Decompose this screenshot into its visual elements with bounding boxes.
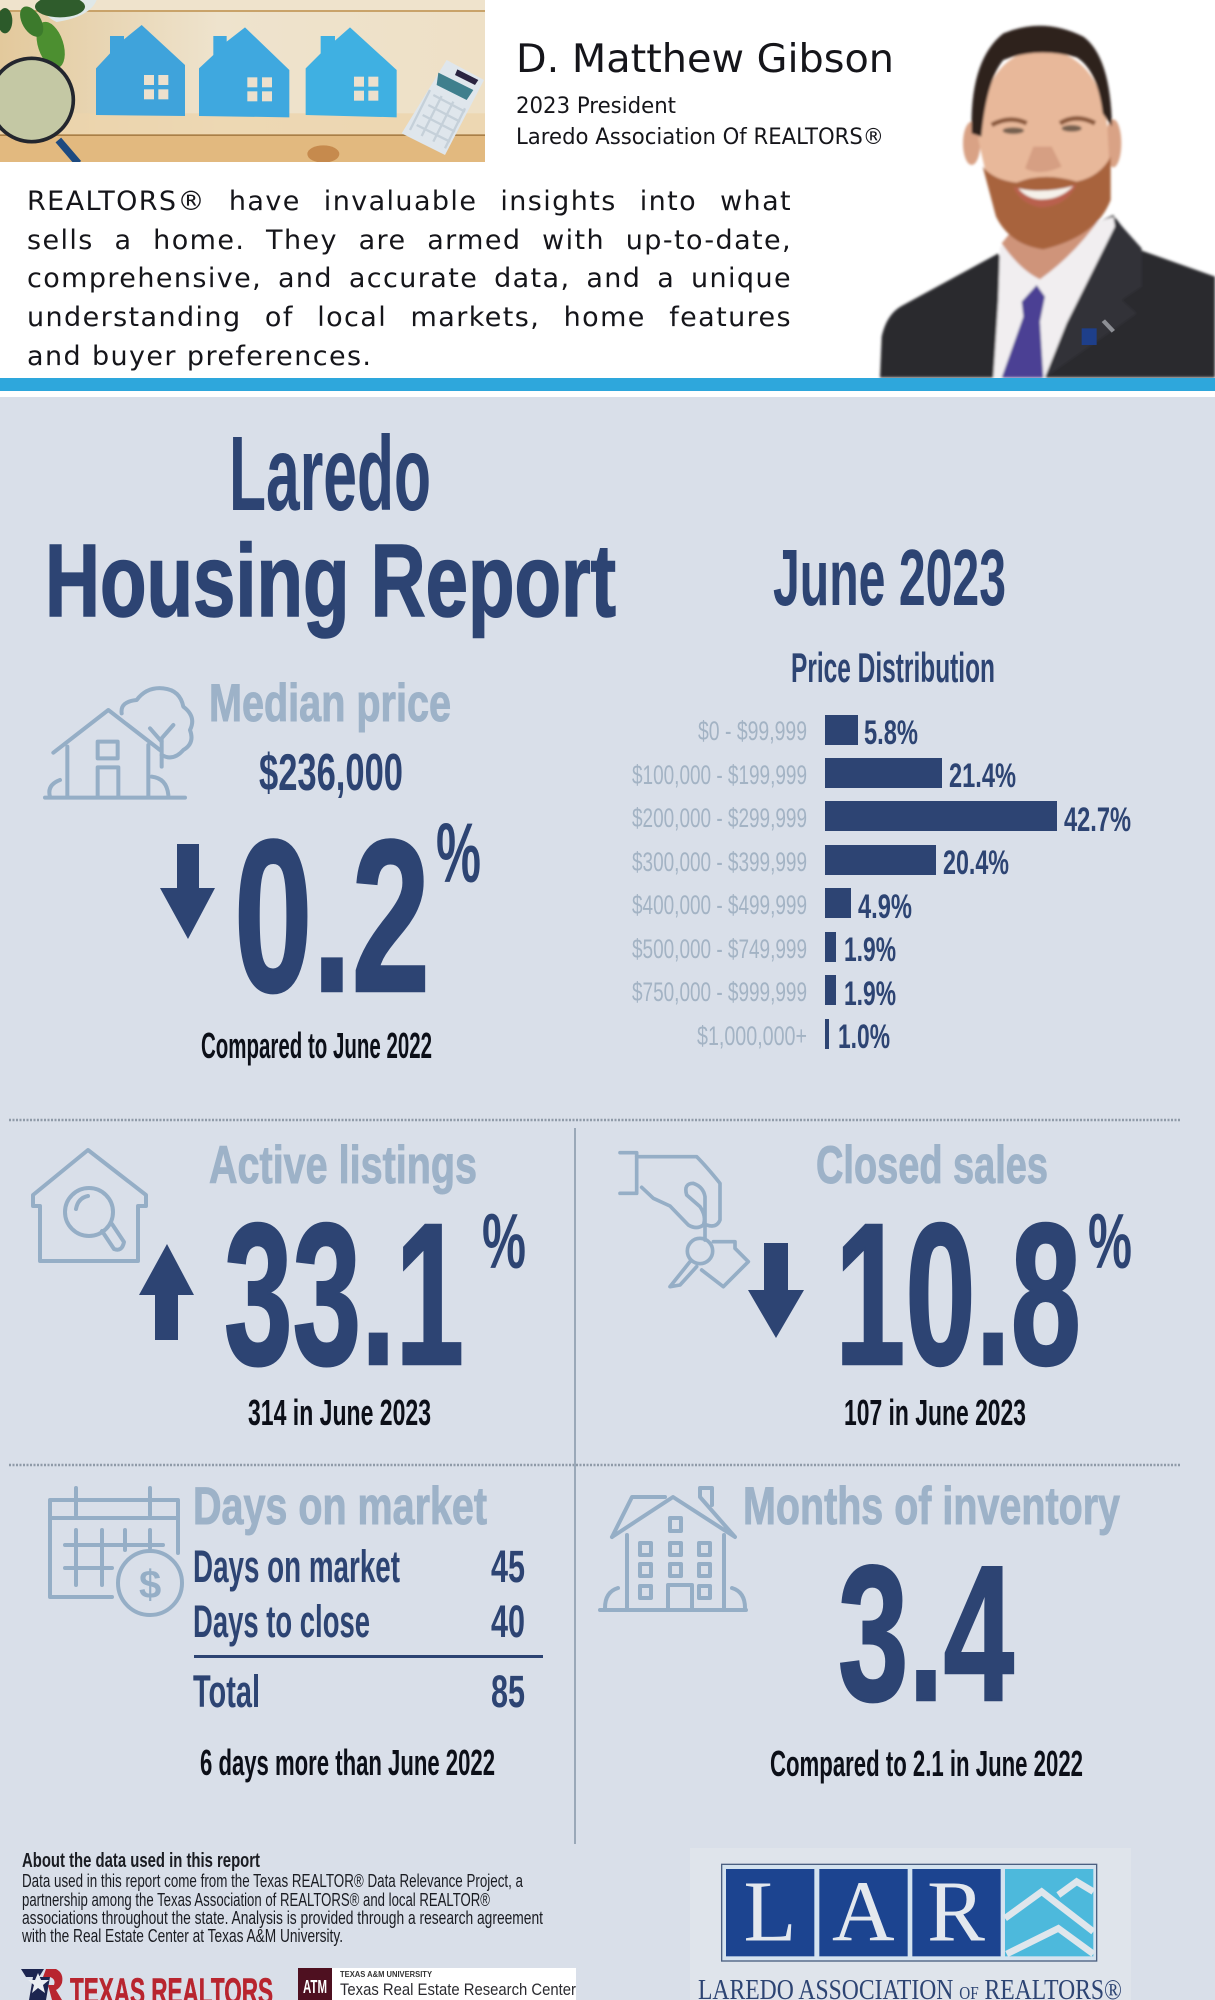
intro paragraph: and buyer preferences. <box>27 341 372 372</box>
presenter name: D. Matthew Gibson <box>516 37 894 82</box>
months of inventory block: 3.4 <box>838 1525 1014 1741</box>
bar chart: price distribution: $1,000,000+ <box>697 1021 807 1051</box>
about the data note: with the Real Estate Center at Texas A&M University. <box>21 1926 343 1946</box>
intro paragraph: sells a home. They are armed with up-to-date, <box>27 225 792 256</box>
intro paragraph: understanding of local markets, home features <box>27 302 792 333</box>
about the data note <box>21 1850 543 1946</box>
bar chart: price distribution: 4.9% <box>858 888 912 926</box>
logo: Laredo Association of Realtors <box>690 1848 1131 2000</box>
bar chart: price distribution: 42.7% <box>1064 801 1131 839</box>
icon: house and tree <box>45 688 192 798</box>
active listings block <box>139 1136 526 1433</box>
icon: calendar with dollar coin: $ <box>139 1563 161 1607</box>
median price block: % <box>436 806 481 900</box>
intro paragraph: REALTORS® have invaluable insights into what <box>27 186 792 217</box>
bar chart: price distribution: $100,000 - $199,999 <box>632 760 807 790</box>
logo: Laredo Association of Realtors: L <box>744 1864 796 1960</box>
logo: Texas A&M Real Estate Research Center: ATM <box>303 1977 327 1997</box>
report title: Housing Report <box>45 523 616 638</box>
bar chart: price distribution: 20.4% <box>943 844 1009 882</box>
portrait of D. Matthew Gibson <box>880 26 1215 378</box>
report title: Laredo <box>229 415 431 533</box>
about the data note: partnership among the Texas Association of REALTORS® and local REALTOR® <box>22 1890 490 1910</box>
days on market block: Days on market <box>193 1541 400 1592</box>
days on market block <box>193 1477 543 1783</box>
bar chart: price distribution: 1.9% <box>844 931 896 969</box>
days on market block: 40 <box>491 1596 525 1647</box>
photo: blue paper houses on wood <box>0 0 485 163</box>
arrow: active listings up <box>139 1244 194 1340</box>
bar chart: price distribution: 1.0% <box>838 1018 890 1056</box>
median price block: 0.2 <box>234 795 430 1037</box>
icon: calendar with dollar coin <box>50 1488 182 1615</box>
icon: multi-storey house <box>600 1488 746 1610</box>
active listings block: 314 in June 2023 <box>248 1392 431 1433</box>
active listings block: Active listings <box>209 1136 477 1195</box>
intro accent stripe <box>0 378 1215 391</box>
bar chart: price distribution: $750,000 - $999,999 <box>632 977 807 1007</box>
about the data note: About the data used in this report <box>22 1850 260 1872</box>
report date: June 2023 <box>773 533 1006 622</box>
icon: house with magnifier <box>33 1150 146 1261</box>
closed sales block: 107 in June 2023 <box>844 1392 1026 1433</box>
icon: hand holding keys <box>620 1153 748 1287</box>
closed sales block: Closed sales <box>816 1136 1048 1195</box>
intro paragraph: comprehensive, and accurate data, and a unique <box>27 263 792 294</box>
days on market block: 45 <box>491 1541 525 1592</box>
arrow: median price down <box>160 844 215 939</box>
months of inventory block <box>743 1477 1120 1784</box>
bar chart: price distribution: $400,000 - $499,999 <box>632 890 807 920</box>
bar chart: price distribution: 1.9% <box>844 975 896 1013</box>
about the data note: Data used in this report come from the Texas REALTOR® Data Relevance Project, a <box>22 1871 524 1891</box>
active listings block: 33.1 <box>224 1181 464 1407</box>
closed sales block <box>748 1136 1132 1433</box>
bar chart: price distribution: 5.8% <box>864 714 918 752</box>
bar chart: price distribution: 21.4% <box>949 757 1016 795</box>
median price block: $236,000 <box>259 744 403 802</box>
days on market block: Total <box>193 1666 260 1717</box>
active listings block: % <box>482 1197 526 1285</box>
days on market block: 85 <box>491 1666 525 1717</box>
bar chart: price distribution: $300,000 - $399,999 <box>632 847 807 877</box>
median price block: Median price <box>209 674 451 733</box>
bar chart: price distribution <box>632 644 1131 1056</box>
logo: Laredo Association of Realtors: A <box>832 1864 895 1960</box>
median price block <box>160 674 481 1066</box>
presenter organisation: Laredo Association Of REALTORS® <box>516 125 884 150</box>
presenter title: 2023 President <box>516 94 676 119</box>
bar chart: price distribution: Price Distribution <box>791 644 995 691</box>
bar chart: price distribution: $500,000 - $749,999 <box>632 934 807 964</box>
logo: Texas A&M Real Estate Research Center: Texas Real Estate Research Center <box>340 1980 576 1999</box>
median price block: Compared to June 2022 <box>201 1025 432 1066</box>
days on market block: 6 days more than June 2022 <box>200 1742 495 1783</box>
bar chart: price distribution: $200,000 - $299,999 <box>632 803 807 833</box>
closed sales block: % <box>1088 1197 1132 1285</box>
days on market block: Days to close <box>193 1596 370 1647</box>
logo: Texas A&M Real Estate Research Center <box>298 1968 576 2000</box>
logo: Texas A&M Real Estate Research Center: TEXAS A&M UNIVERSITY <box>340 1970 433 1979</box>
arrow: closed sales down <box>748 1243 804 1338</box>
about the data note: associations throughout the state. Analysis is provided through a research agreement <box>22 1908 543 1928</box>
days on market block: Days on market <box>193 1477 487 1536</box>
report title <box>45 415 616 638</box>
logo: Laredo Association of Realtors: R <box>927 1864 985 1960</box>
bar chart: price distribution: $0 - $99,999 <box>698 716 807 746</box>
logo: Texas Realtors <box>21 1969 273 2000</box>
intro paragraph <box>27 186 792 372</box>
